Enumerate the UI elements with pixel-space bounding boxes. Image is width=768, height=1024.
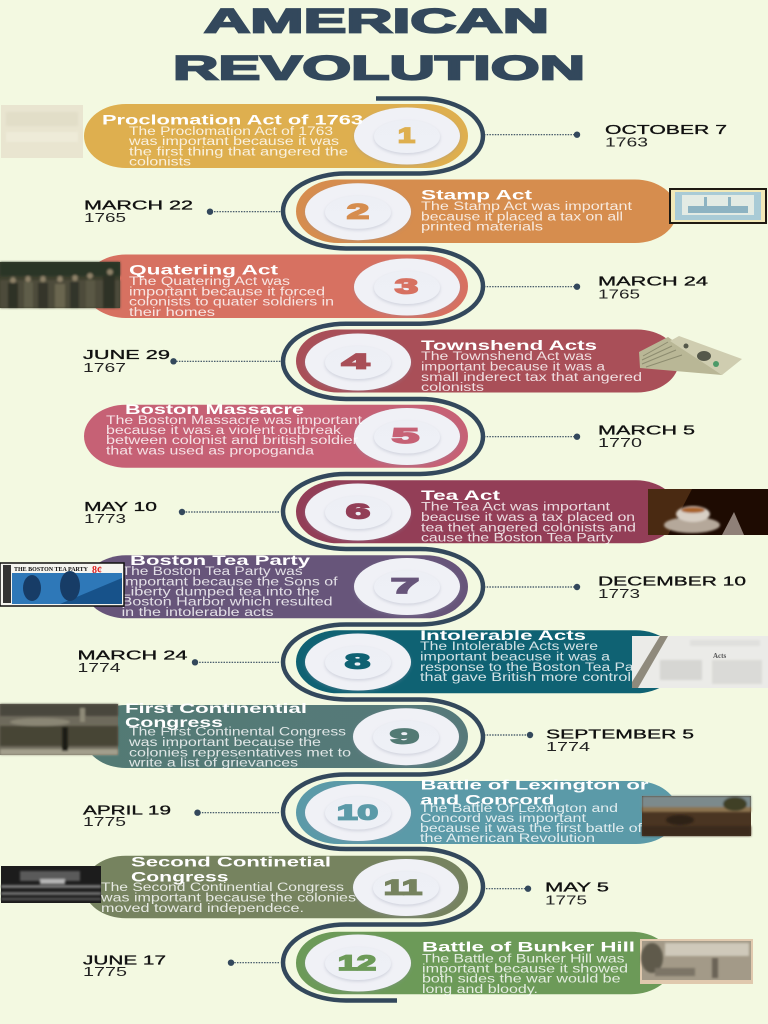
heading: Boston Massacre bbox=[125, 401, 304, 417]
number disc bbox=[354, 258, 460, 316]
description: The Battle of Bunker Hill was bbox=[422, 953, 625, 965]
description: The Intolerable Acts were bbox=[420, 641, 598, 653]
number disc: 5 bbox=[392, 425, 420, 448]
heading: Congress bbox=[125, 714, 223, 730]
description: The Battle Of Lexington and bbox=[420, 803, 618, 815]
description: The Second Continential Congress bbox=[101, 882, 344, 894]
description: important because it forced bbox=[129, 286, 325, 298]
connector and date: 1770 bbox=[598, 435, 642, 450]
description: beacuse it was a tax placed on bbox=[421, 512, 635, 524]
connector and date: OCTOBER 7 bbox=[605, 122, 727, 137]
heading: Intolerable Acts bbox=[420, 627, 586, 643]
connector and date bbox=[83, 347, 283, 375]
number disc: 6 bbox=[346, 500, 370, 524]
number disc: 11 bbox=[384, 876, 423, 900]
heading: Stamp Act bbox=[421, 186, 533, 202]
description: The Boston Tea Party was bbox=[122, 566, 303, 578]
pill bbox=[296, 932, 673, 994]
number disc bbox=[354, 558, 460, 615]
description: colonists to quater soldiers in bbox=[129, 297, 334, 309]
event 3: Quartering Act bbox=[0, 254, 708, 319]
description bbox=[106, 415, 363, 457]
event 8: Intolerable Acts bbox=[78, 627, 768, 693]
number disc bbox=[305, 484, 411, 540]
connector and date bbox=[484, 422, 695, 450]
description: The Townshend Act was bbox=[421, 351, 592, 363]
picture: Boston Tea Party stamp bbox=[0, 563, 124, 606]
heading: Proclomation Act of 1763 bbox=[102, 112, 363, 128]
description: the American Revolution bbox=[420, 833, 595, 845]
heading bbox=[420, 776, 649, 808]
description bbox=[421, 201, 633, 234]
number disc bbox=[353, 859, 459, 916]
number disc: 8 bbox=[345, 650, 371, 674]
connector and date: 1763 bbox=[605, 135, 648, 150]
description: because it was the first battle of bbox=[420, 823, 643, 835]
connector and date bbox=[84, 499, 279, 526]
picture: soldiers bbox=[0, 262, 120, 308]
connector and date: 1765 bbox=[598, 287, 640, 302]
connector and date bbox=[484, 574, 746, 601]
description: moved toward independece. bbox=[101, 903, 304, 915]
number disc: 2 bbox=[347, 200, 369, 224]
description: colonists bbox=[129, 157, 191, 169]
connector and date bbox=[83, 952, 279, 979]
heading bbox=[131, 854, 331, 884]
description: write a list of grievances bbox=[128, 757, 298, 769]
connector and date: 1773 bbox=[84, 511, 126, 526]
description bbox=[421, 502, 636, 545]
number disc bbox=[354, 108, 460, 164]
description: the first thing that angered the bbox=[129, 146, 348, 158]
description: both sides the war would be bbox=[422, 974, 620, 986]
picture: fan of dollar bills bbox=[639, 336, 742, 375]
description: because it was a violent outbreak bbox=[106, 425, 341, 437]
event 10: Lexington and Concord bbox=[83, 776, 751, 845]
heading: Second Continetial bbox=[131, 854, 331, 870]
pill bbox=[296, 480, 678, 543]
pill bbox=[84, 705, 468, 768]
connector and date bbox=[484, 122, 727, 150]
pill bbox=[296, 330, 679, 392]
description: The First Continental Congress bbox=[129, 727, 346, 739]
title: REVOLUTION bbox=[173, 50, 585, 88]
number disc bbox=[305, 634, 411, 690]
description: response to the Boston Tea Party bbox=[420, 662, 651, 674]
title bbox=[173, 2, 585, 88]
picture: Boston Tea Party stamp: 8¢ bbox=[92, 565, 102, 576]
number disc: 1 bbox=[398, 124, 415, 148]
pill bbox=[84, 856, 468, 918]
picture: congress engraving bbox=[0, 704, 118, 755]
event 6: Tea Act bbox=[84, 480, 768, 545]
number disc bbox=[305, 334, 411, 390]
description: The Stamp Act was important bbox=[421, 201, 633, 213]
number disc: 7 bbox=[391, 575, 419, 598]
connector and date bbox=[484, 726, 694, 754]
description: Concord was important bbox=[420, 813, 587, 825]
picture: parchment bbox=[1, 105, 83, 158]
number disc: 4 bbox=[342, 350, 370, 374]
connector and date: 1774 bbox=[546, 739, 590, 754]
event 9: First Continental Congress bbox=[0, 700, 694, 769]
picture: assembly hall photo bbox=[1, 866, 101, 903]
description: tea thet angered colonists and bbox=[421, 522, 636, 534]
description: small inderect tax that angered bbox=[421, 372, 642, 384]
heading: Battle of Bunker Hill bbox=[422, 938, 635, 954]
number disc bbox=[354, 408, 460, 465]
connector and date bbox=[78, 647, 279, 675]
pill bbox=[84, 405, 468, 468]
connector and date: JUNE 17 bbox=[83, 952, 166, 967]
number disc bbox=[305, 934, 411, 992]
connector and date: MARCH 5 bbox=[598, 422, 695, 437]
description: important because it showed bbox=[422, 963, 628, 975]
description bbox=[420, 803, 643, 845]
picture: postage stamp bbox=[669, 188, 767, 224]
event 12: Battle of Bunker Hill bbox=[83, 932, 753, 996]
heading: Battle of Lexington or bbox=[420, 776, 649, 792]
event 7: Boston Tea Party bbox=[0, 552, 746, 619]
heading: Boston Tea Party bbox=[130, 552, 310, 568]
pill bbox=[84, 555, 468, 618]
description: in the intolerable acts bbox=[122, 607, 274, 619]
connector and date: MARCH 24 bbox=[598, 274, 708, 289]
heading: Congress bbox=[131, 868, 229, 884]
connector and date bbox=[486, 880, 609, 907]
description bbox=[100, 882, 356, 915]
connector and date: MAY 10 bbox=[84, 499, 157, 514]
connector and date: 1775 bbox=[83, 964, 127, 979]
description: that gave British more control bbox=[420, 672, 631, 684]
event 11: Second Continental Congress bbox=[1, 854, 609, 918]
description bbox=[128, 727, 351, 769]
description: cause the Boston Tea Party bbox=[421, 533, 613, 545]
picture: Bunker Hill engraving bbox=[640, 939, 753, 984]
description bbox=[422, 953, 628, 996]
picture: cup of tea bbox=[648, 489, 768, 535]
description: The Quatering Act was bbox=[129, 276, 290, 288]
description bbox=[420, 641, 651, 684]
connector and date bbox=[83, 802, 279, 829]
heading: First Continential bbox=[125, 700, 307, 716]
description: The Boston Massacre was important bbox=[106, 415, 363, 427]
connector and date: APRIL 19 bbox=[83, 802, 171, 817]
number disc: 12 bbox=[338, 952, 376, 975]
connector and date: 1773 bbox=[598, 586, 640, 601]
connector and date: 1767 bbox=[83, 360, 126, 375]
connector and date: JUNE 29 bbox=[83, 347, 170, 362]
picture: battle painting bbox=[642, 796, 751, 836]
heading: Townshend Acts bbox=[421, 337, 597, 353]
pill bbox=[296, 781, 678, 844]
description: their homes bbox=[129, 307, 215, 319]
pill bbox=[84, 104, 468, 168]
connector and date bbox=[484, 274, 708, 302]
picture: open book of acts: Acts bbox=[713, 652, 726, 660]
heading: and Concord bbox=[420, 792, 554, 808]
event 5: Boston Massacre bbox=[84, 401, 695, 468]
description bbox=[421, 351, 642, 394]
description: important because it was a bbox=[421, 362, 606, 374]
description: important because the Sons of bbox=[122, 576, 339, 588]
connector and date: MAY 5 bbox=[545, 880, 609, 895]
serpentine timeline line bbox=[283, 98, 483, 1000]
description: because it placed a tax on all bbox=[421, 211, 623, 223]
pill bbox=[84, 254, 468, 318]
title: AMERICAN bbox=[204, 2, 549, 40]
number disc: 10 bbox=[337, 802, 378, 824]
event 4: Townshend Acts bbox=[83, 330, 742, 394]
pill bbox=[296, 180, 677, 243]
heading: Tea Act bbox=[421, 487, 501, 503]
description: colonies representatives met to bbox=[129, 747, 351, 759]
description: that was used as propoganda bbox=[106, 445, 315, 457]
connector and date: 1775 bbox=[545, 892, 587, 907]
connector and date: 1774 bbox=[78, 660, 120, 675]
description: was important because it was bbox=[128, 136, 339, 148]
description: colonists bbox=[421, 382, 484, 394]
number disc: 3 bbox=[395, 276, 418, 298]
connector and date: DECEMBER 10 bbox=[598, 574, 746, 589]
heading bbox=[125, 700, 307, 730]
number disc bbox=[305, 183, 411, 240]
description: important beacuse it was a bbox=[420, 651, 611, 663]
connector and date: 1775 bbox=[83, 814, 126, 829]
description: The Proclomation Act of 1763 bbox=[129, 126, 333, 138]
picture: open book of acts bbox=[632, 636, 768, 688]
description bbox=[122, 566, 339, 619]
pill bbox=[296, 630, 678, 693]
description: between colonist and british soldier bbox=[106, 435, 358, 447]
connector and date bbox=[84, 197, 283, 225]
connector and date: SEPTEMBER 5 bbox=[546, 726, 694, 741]
description: was important because the bbox=[128, 737, 321, 749]
description: The Tea Act was important bbox=[421, 502, 611, 514]
description bbox=[128, 126, 348, 169]
description: was important because the colonies bbox=[100, 893, 356, 905]
description: printed materials bbox=[421, 222, 543, 234]
connector and date: MARCH 24 bbox=[78, 647, 188, 662]
description bbox=[129, 276, 334, 319]
connector and date: MARCH 22 bbox=[84, 197, 193, 212]
connector and date: 1765 bbox=[84, 210, 126, 225]
number disc bbox=[353, 708, 459, 765]
description: Boston Harbor which resulted bbox=[122, 597, 333, 609]
description: Liberty dumped tea into the bbox=[122, 586, 320, 598]
number disc: 9 bbox=[390, 726, 419, 748]
event 1: Proclamation Act bbox=[1, 104, 727, 169]
picture: Boston Tea Party stamp: THE BOSTON TEA PARTY bbox=[14, 567, 89, 573]
number disc bbox=[305, 784, 411, 841]
event 2: Stamp Act bbox=[84, 180, 767, 243]
heading: Quatering Act bbox=[129, 261, 279, 277]
description: long and bloody. bbox=[422, 984, 538, 996]
